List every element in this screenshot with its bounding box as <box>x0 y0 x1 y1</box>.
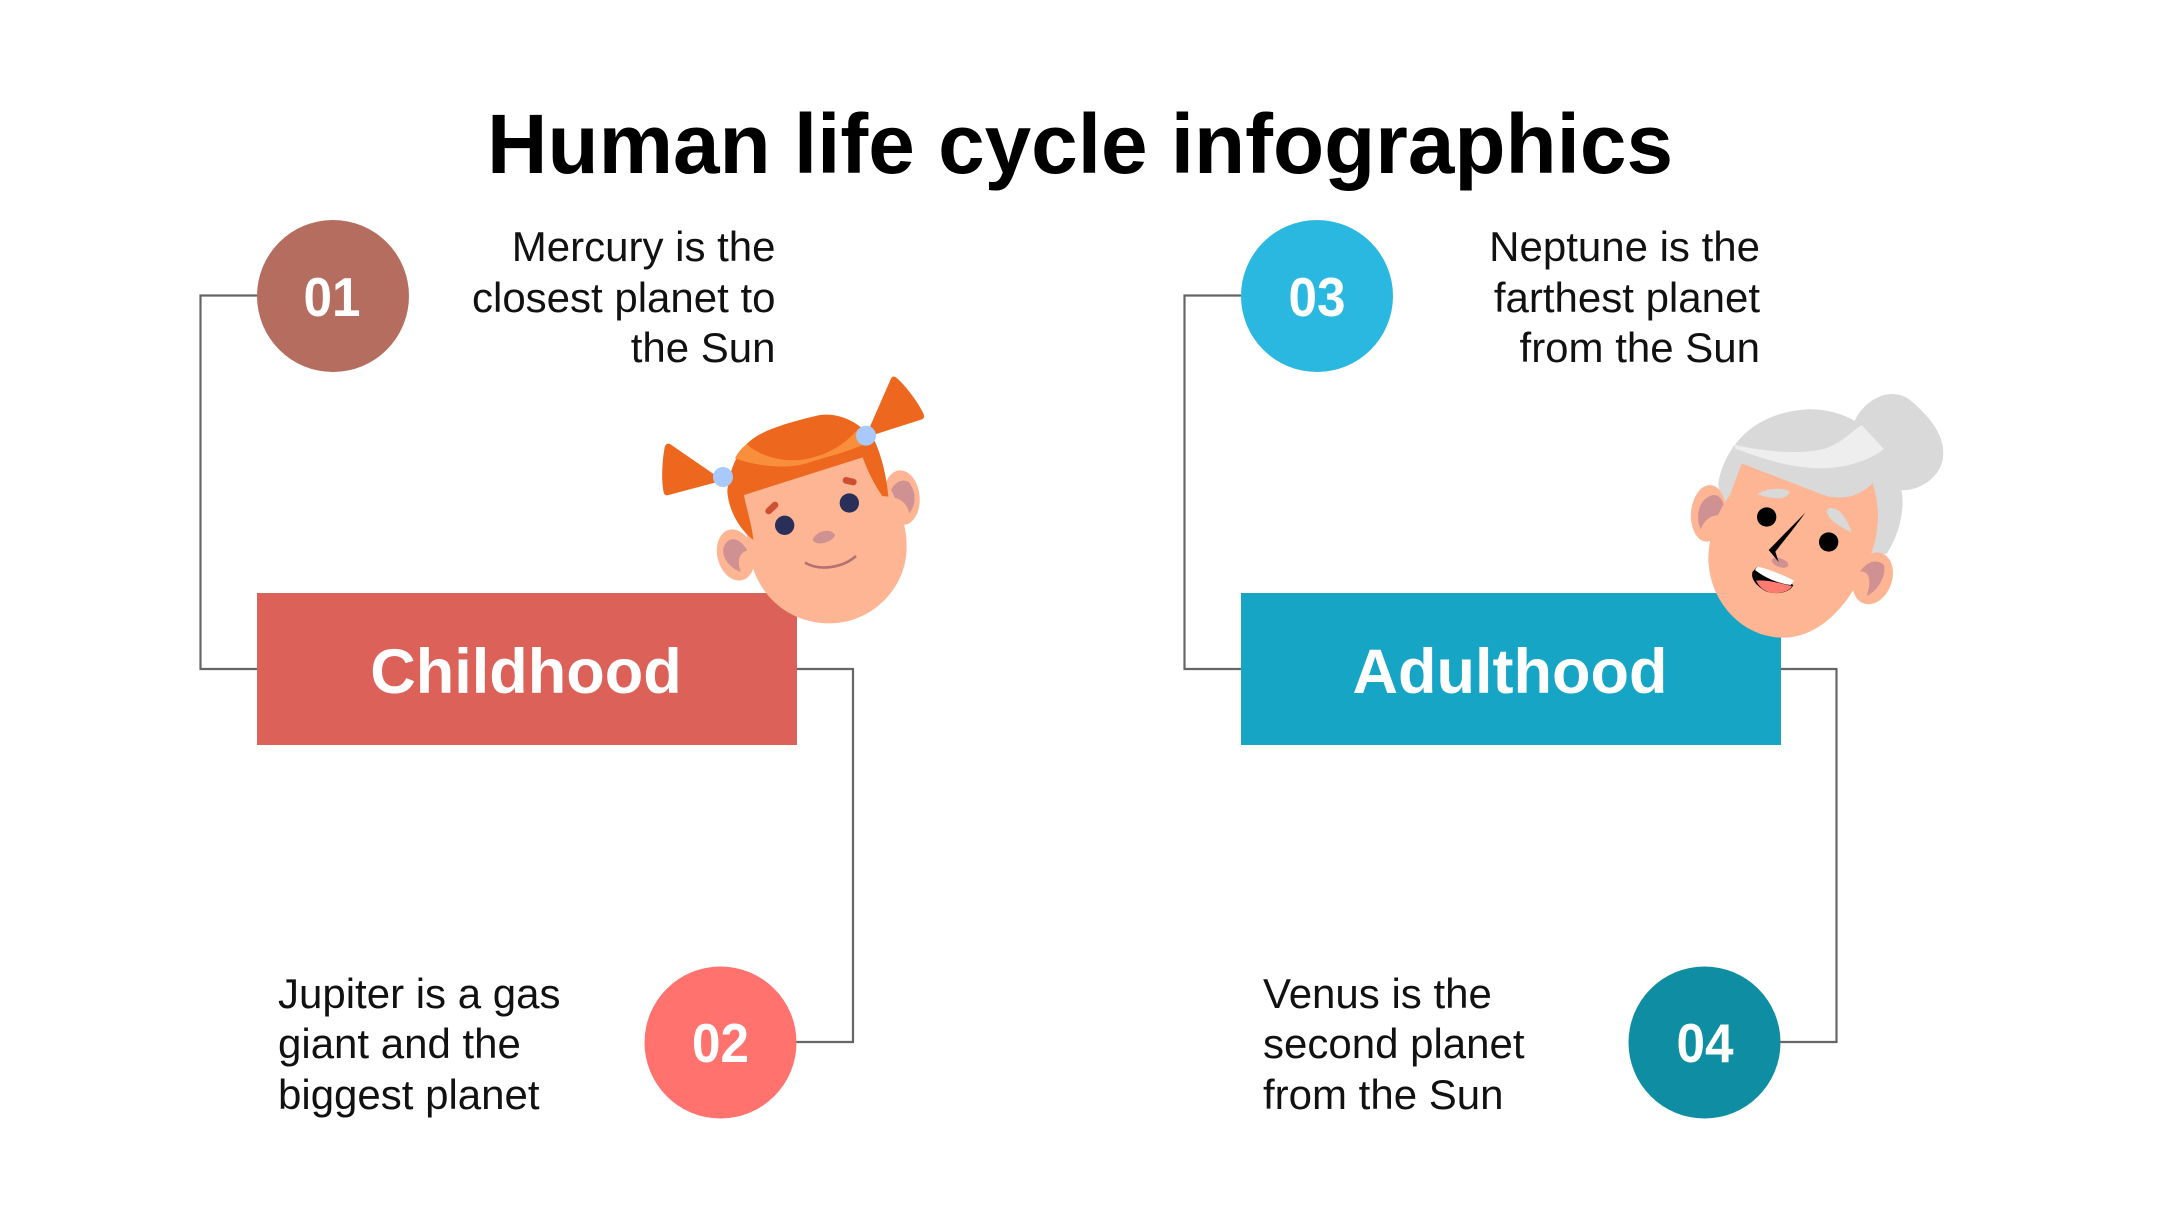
step 01 text: Mercury is the <box>512 223 776 270</box>
step 01 badge: 01 <box>304 266 360 328</box>
step 04 text: second planet <box>1263 1020 1525 1067</box>
step 03 text: from the Sun <box>1520 324 1760 371</box>
icon: girl face <box>662 377 924 623</box>
adulthood label bar <box>1241 593 1781 745</box>
step 04 text: Venus is the <box>1263 970 1492 1017</box>
step 04 text: from the Sun <box>1263 1071 1503 1118</box>
panel: childhood <box>200 220 924 1118</box>
step 02 badge: 02 <box>692 1012 749 1074</box>
childhood label bar: Childhood <box>370 637 682 707</box>
title: Human life cycle infographics <box>487 97 1673 191</box>
step 03 badge <box>1241 220 1393 372</box>
step 02 text: Jupiter is a gas <box>278 970 560 1017</box>
step 02 text: giant and the <box>278 1020 521 1067</box>
step 02 badge <box>644 966 796 1118</box>
connector: childhood to 02 <box>796 669 853 1042</box>
icon: old woman face <box>1689 394 1943 638</box>
adulthood label bar: Adulthood <box>1353 637 1667 707</box>
step 01 badge <box>257 220 409 372</box>
childhood label bar <box>257 593 797 745</box>
step 01 text: closest planet to <box>472 274 776 321</box>
connector: 03 to adulthood <box>1184 296 1241 669</box>
step 03 text: farthest planet <box>1494 274 1760 321</box>
step 03 text: Neptune is the <box>1489 223 1760 270</box>
step 01 text: the Sun <box>631 324 776 371</box>
step 03 badge: 03 <box>1288 266 1346 328</box>
connector: 01 to childhood <box>200 296 258 669</box>
panel: adulthood <box>1184 220 1943 1118</box>
connector: adulthood to 04 <box>1779 669 1836 1042</box>
step 04 badge <box>1628 966 1780 1118</box>
step 02 text: biggest planet <box>278 1071 540 1118</box>
step 04 badge: 04 <box>1676 1012 1734 1074</box>
